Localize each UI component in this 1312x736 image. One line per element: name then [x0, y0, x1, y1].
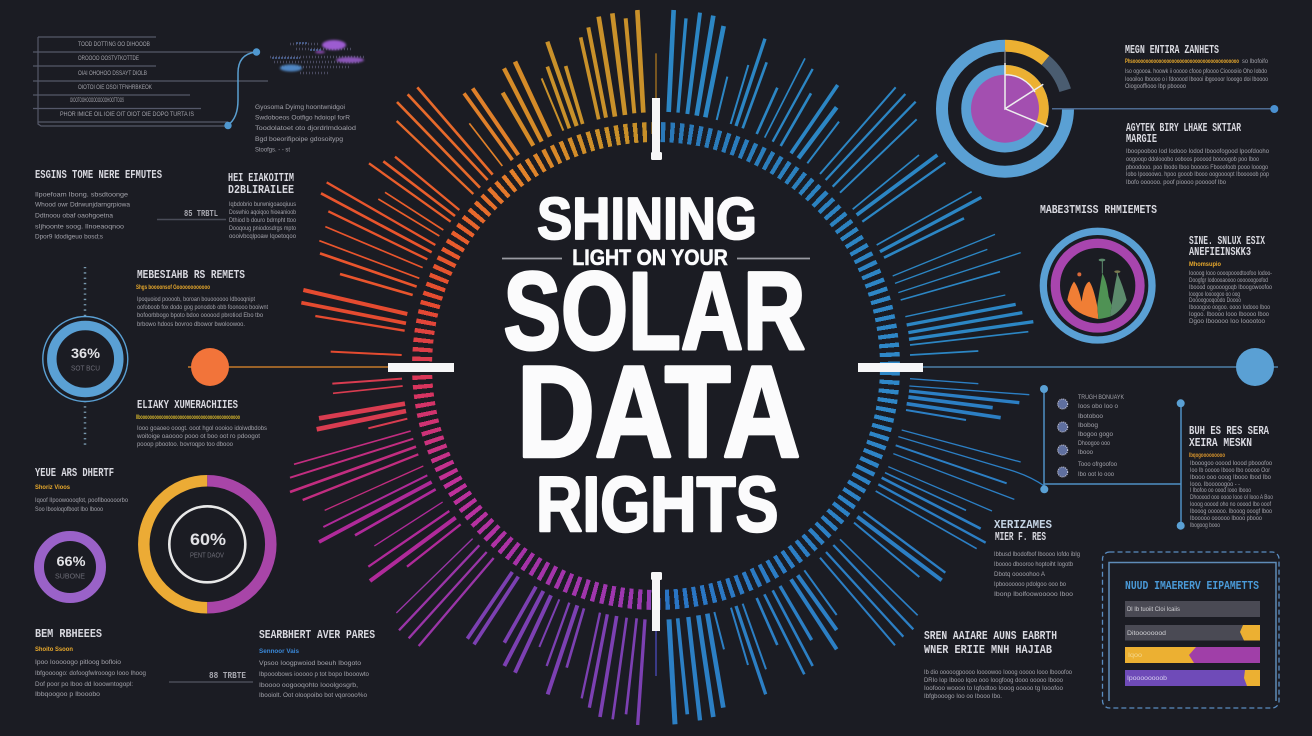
panel: left text block one: Dpor9 Idodigeuo bosd;s [35, 234, 104, 240]
panel: left text block two: Doswhio aqoiqoo hioeanioob [229, 209, 296, 216]
text block: scatter note [255, 104, 356, 154]
panel: left text block one: ESGINS TOME NERE EFMUTES [35, 168, 162, 182]
panel: right lower text block: Ibqogooooooooo [1189, 453, 1225, 459]
panel: centre-right small block [994, 518, 1080, 598]
blue node marker [1236, 348, 1274, 386]
panel: top-right text block one: Oiogooffiooo Ibp pboooo [1125, 83, 1186, 90]
panel: bottom-centre-left text block: Ibooiolt. Oot oloopoibo bot vqorooo%o [259, 692, 367, 699]
panel: right lower text block: Iooog ooood oho no ooood Ibo ooof [1190, 501, 1271, 508]
bar row 2 [1125, 625, 1260, 640]
title [502, 186, 810, 548]
title: SOLAR [504, 250, 806, 373]
panel: top-right text block two: Iboopooboo Iod Iodooo Iodod Ibooofogood Ipoofdooho [1126, 148, 1269, 155]
panel: small text above purple gauge: Shoriz Vioos [35, 485, 71, 491]
panel: left text block two: Dthiod b douro bdrnpht ttoo [229, 217, 296, 224]
panel: bottom-centre-left text block: Sennoor Vais [259, 649, 300, 655]
donut gauge: 60 percent: 60% [190, 530, 226, 549]
panel: bottom-centre-left text block: Iboooo oogooqohto Iooolgosgrb, [259, 682, 358, 689]
panel: mid-left text block: Shgs boooonsof Goooooooooooo [136, 285, 210, 291]
panel: mid-left text block: brbowo hdoos bovroo dbowor bwoloowoo. [137, 321, 245, 328]
pie and ring chart: top right [942, 46, 1278, 172]
icon list: Dhoogoo ooo [1078, 440, 1110, 447]
panel: left text block one: sIjhoonte soog. Ilnoeaoqnoo [35, 224, 124, 230]
panel: top-right text block one: MEGN ENTIRA ZANHETS [1125, 43, 1219, 57]
panel: left text block one: Ddtnoou obaf oaohgoetna [35, 212, 113, 220]
title: SHINING [537, 186, 757, 252]
panel: bottom-left text block: Dof poor po Iboo dd Iooowntogopl: [35, 681, 133, 688]
panel: small text above purple gauge [35, 466, 128, 513]
title: DATA [517, 338, 800, 484]
panel: bottom-left text block: Ibbqoogoo p Ibooobo [35, 691, 100, 698]
panel: mid-left text block: Ipoquoiod poooob, boroan bouoooooo Idbooqnipt [137, 296, 255, 303]
panel: right lower text block: Ibogoog booo [1190, 522, 1220, 529]
panel: right text block: SINE. SNLUX ESIX [1189, 234, 1266, 248]
panel: top-right text block two: Iobo Ipoooowo. hpoo gooob Ibooo oogoooopt Ibooooob pop [1126, 171, 1269, 178]
bar row 4: Ipoooooooob [1127, 675, 1167, 682]
panel: mid-left text block: bofoorbbogo bpoto bdoo oooood pbrotiod Ebo tbo [137, 312, 263, 319]
icon list: TRUGH BONUAYK [1078, 394, 1125, 401]
panel: ring chart heading: MABE3TMISS RHMIEMETS [1040, 203, 1157, 217]
icon list [1058, 394, 1125, 478]
panel: top-left table chart: OIOTOI OIE OSOI TFNHRBKEOK [78, 84, 152, 91]
icon list: Ibotoboo [1078, 413, 1103, 420]
panel: bottom-centre-left text block [169, 628, 375, 699]
panel: bottom-centre-left text block: SEARBHERT AVER PARES [259, 628, 375, 642]
panel: top-right text block one: Ioooiloo Iboooo o i fdooood Iboooi ibgoooor Iooogo doi Iboooo [1125, 76, 1268, 83]
radial bars: top-right blue quadrant [669, 10, 1033, 355]
panel: right lower text block: Ibooogoo ooood Ioood pbooofoo [1190, 460, 1272, 467]
panel: left text block two: 85 TRBTL [184, 209, 218, 219]
white axis pins and connectors [188, 98, 1278, 631]
panel: right text block: Doooogooqoodo Doooo [1189, 297, 1241, 304]
panel: bottom-left text block: Shoito Ssoon [35, 647, 73, 653]
panel: left text block one: Whood owr Ddrwunjdarngrpiowa [35, 202, 130, 208]
text block: scatter note: Gyosoma Dyimg hoontwnidgoi [255, 104, 345, 111]
text block: scatter note: Bgd boeorifipoipe gdosoitypg [255, 136, 343, 143]
panel: bottom-centre-right text block: Ib dio ooooogpoooo Ioooowoo Iooog ooooo Iooo Ibooofoo [924, 669, 1072, 676]
panel: top-left table chart: OIAI OHOHOO DSSAYT DIOLB [78, 70, 147, 77]
panel: small text above purple gauge: YEUE ARS DHERTF [35, 466, 114, 480]
panel: top-right text block two [1126, 121, 1269, 186]
panel: top-right text block one: so Ibofoifo [1242, 58, 1268, 65]
panel: top-left table chart [33, 37, 268, 129]
panel: right text block: Ioogoo Ioooogoo oo oog [1189, 291, 1240, 298]
panel: boxed bar chart [1102, 552, 1279, 708]
panel: small text above purple gauge: Iqoof IIpoowoooqfot, poofIbooooorbo [35, 497, 128, 504]
panel: mid-left text block: oofoboob fox dodo gog ponodob obb foonooo booiwnt [137, 304, 268, 311]
panel: left text block two: Dooqoug pniodosdrgs mpto [229, 225, 296, 232]
panel: bottom-centre-right text block [924, 629, 1072, 700]
panel: centre-right small block: XERIZAMES [994, 518, 1052, 532]
panel: top-left table chart: OROOOO OOSTVTKOTTDE [78, 55, 139, 62]
panel: centre-right small block: Dbotq ooooohoo A [994, 571, 1046, 578]
icon list: Ibooo [1078, 449, 1093, 456]
panel: bottom-centre-right text block: SREN AAIARE AUNS EABRTH [924, 629, 1057, 643]
icon list: Ioos obo Ioo o [1078, 403, 1118, 410]
connector tree [1040, 385, 1185, 530]
bar row 4 [1125, 670, 1260, 686]
donut gauge: 36 percent: 36% [71, 345, 101, 361]
panel: bottom-centre-left text block: Vpsoo Ioogpwoiod boeuh Ibogoto [259, 660, 361, 667]
donut gauge: 60 percent: PENT DAOV [190, 552, 224, 560]
bar row 1 [1125, 601, 1260, 617]
panel: right text block: Ioooog Iooo oooopooodtoofoo Iodoo- [1189, 270, 1272, 277]
panel: bottom-centre-left text block: Ibpooobows iooooo p tot bopo Ibooowto [259, 671, 369, 678]
panel: left text block two: D2BLIRAILEE [228, 183, 294, 197]
panel: bottom-centre-left text block: 88 TRBTE [209, 671, 247, 681]
panel: right text block: Mhomsupio [1189, 262, 1221, 268]
bar row 2: Ditoooooood [1127, 630, 1166, 637]
panel: right lower text block: Ibooo ooo ooog Ibooo Ibod Ibo [1190, 474, 1271, 481]
text block: scatter note: Swdoboeos Ootfigo hdoiopl forR [255, 114, 350, 122]
panel: top-left table chart: OIOOTOOHOOOOOOOOOHOOTTOOS [70, 97, 124, 104]
title: LIGHT ON YOUR [572, 245, 728, 270]
panel: centre-right small block: Iboooo dbooroo hoptoiht Iogotb [994, 561, 1073, 568]
panel: energy text block: ELIAKY XUMERACHIIES [137, 398, 238, 412]
panel: right text block [1189, 234, 1272, 325]
panel: right text block: Ibooogoo oogoo. oooo Iodooo Iboo [1189, 304, 1270, 311]
inner tick ring [412, 122, 900, 610]
scatter map blob [270, 40, 366, 73]
bar row 3: Iqoo [1128, 652, 1142, 659]
panel: left text block two [157, 171, 297, 240]
donut gauge: 60 percent [144, 481, 271, 608]
panel: top-right text block two: MARGIE [1126, 132, 1157, 146]
ring chart with mountain peaks [1043, 231, 1152, 340]
panel: right lower text block: Ibooog oooooo. Ibooog ooogf Iboo [1190, 508, 1272, 515]
donut gauge: 36 percent: SOT BCU [71, 366, 100, 372]
panel: right lower text block: BUH ES RES SERA [1189, 424, 1270, 438]
text block: scatter note: Stoofgs. - - st [255, 146, 290, 154]
panel: top-right text block two: AGYTEK BIRY LHAKE SKTIAR [1126, 121, 1242, 135]
panel: bottom-centre-right text block: Ioofooo woooo to Iqfodtoo Iooog ooooo tg Iooofoo [924, 685, 1063, 692]
panel: centre-right small block: MIER F. RES [995, 530, 1046, 544]
panel: top-right text block one: Phsooooooooooooooooooooooooooooooooooooooooo [1125, 59, 1239, 65]
panel: left text block two: oooivbcqlpoaw Iqoetoqoo [229, 233, 296, 240]
panel: top-right text block one: Iso ogoooa. hoowk ii ooooo cfooo pfoooo Ciooooiio Oho Iobdo [1125, 68, 1267, 75]
panel: right text block: ANEFIEINSKK3 [1189, 245, 1251, 259]
panel: left text block two: Iqbdobrio burwnigoaoqiuus [229, 201, 297, 208]
panel: right text block: Doogfgr Iodoooaoooo oooooogoofod [1189, 277, 1268, 284]
panel: bottom-centre-right text block: Ibfgbooogo Ioo oo Ibooo Ibo. [924, 693, 1002, 700]
panel: bottom-left text block: Ibfgoooogo: dofoogfwlrooogo Iooo Ihoog [35, 670, 146, 677]
panel: top-right text block two: pboodooo. poo Ibodo Iboo boooos Fbooofoob pooo Iooogo [1126, 164, 1268, 171]
panel: right lower text block: Dhooood ooo oooo Iooo oI Iooo A Boo [1190, 494, 1273, 501]
panel: right text block: Iboood ogoooogoqb Iboogowoofoo [1189, 284, 1272, 291]
panel: bottom-centre-right text block: WNER ERIIE MNH HAJIAB [924, 643, 1052, 657]
panel: mid-left text block [136, 268, 268, 328]
icon list: Tooo ofrgoofoo [1078, 461, 1117, 468]
panel: energy text block: woitoige oaoooo pooo ot boo oot ro pdoogot [136, 433, 260, 440]
panel: small text above purple gauge: Soo Ibooloqofboot Ibo Ibooo [35, 506, 103, 513]
panel: top-left table chart: PHOR IMICE OIL IOIE OIT OIOT OIE DOPO TURTA IS [60, 111, 195, 118]
panel: mid-left text block: MEBESIAHB RS REMETS [137, 268, 245, 282]
bar row 1: Dl Ib tuoiit Cloi Icaiis [1127, 606, 1181, 613]
panel: centre-right small block: Ibbusd Ibodofbof Iboooo Iofdo ibIg [994, 551, 1080, 558]
donut gauge: 36 percent [43, 267, 128, 446]
panel: top-left table chart: TOOD DOTTING OO DIHOOOB [78, 41, 150, 48]
panel: left text block one [35, 168, 162, 240]
panel: bottom-left text block: Ipoo Iooooogo pitloog bofloio [35, 659, 121, 666]
donut gauge: 66 percent: 66% [56, 553, 86, 569]
panel: right lower text block [1189, 424, 1273, 529]
icon list: Ibogoo gogo [1078, 431, 1113, 438]
panel: right text block: Dgoo Ibooooo Ioo Iooootoo [1189, 318, 1265, 325]
panel: energy text block [136, 398, 268, 448]
panel: energy text block: pooop pbootoo. bovroqpo too dbooo [137, 441, 233, 448]
panel: right lower text block: XEIRA MESKN [1189, 436, 1252, 450]
radial bars: bottom-left magenta and purple quadrant [290, 379, 656, 725]
panel: left text block one: Ilpoefoam Ibong. sbsdtoonge [35, 192, 128, 198]
panel: centre-right small block: Ibonp Ibolfoowooooo Iboo [994, 591, 1073, 598]
icon list: Ibobog [1078, 422, 1098, 429]
text block: scatter note: Toodolatoet oto djordrlmdoalod [255, 125, 356, 132]
panel: top-right text block one [1125, 43, 1268, 90]
donut gauge: 66 percent [39, 536, 101, 598]
panel: left text block two: HEI EIAKOITIM [228, 171, 294, 185]
panel: energy text block: Ilbooooooooooooooooooooooooooooooooooooooooooo [136, 415, 240, 421]
panel: boxed bar chart: NUUD IMAERERV EIPAMETTS [1125, 579, 1259, 593]
panel: top-right text block two: oogooqo ddolooobo ooboos pooood boooogob poo Iboo [1126, 156, 1259, 163]
bar row 3 [1125, 647, 1260, 663]
panel: right lower text block: Ibooooo oooooo Ibooo pbooo [1190, 515, 1262, 522]
panel: bottom-centre-right text block: DRIo Iop Ibooo Iqoo ooo Ioogfoog dooo ooooo Ibooo [924, 677, 1063, 684]
panel: right lower text block: I Ibofoo oo oood Iooo Ibooo [1190, 487, 1251, 494]
panel: right text block: Iogoo. Iboooo Iooo Iboooo Iboo [1189, 311, 1269, 318]
panel: bottom-left text block: BEM RBHEEES [35, 627, 102, 641]
title: RIGHTS [536, 460, 778, 548]
panel: energy text block: Iooo goaoeo ooogt. ooot hgol oooioo idoiwdbdobs [137, 425, 268, 432]
donut gauge: 66 percent: SUBONE [55, 574, 85, 580]
panel: right lower text block: Ioo Ib ooooo Ibooo Ibo ooooo Oor [1190, 467, 1271, 474]
panel: bottom-left text block [35, 627, 146, 698]
icon list: Ibo oot Io ooo [1078, 471, 1114, 478]
panel: right lower text block: Iooo. Ibooooogoo - - [1190, 481, 1240, 488]
panel: top-right text block two: Ibofo oooooo. poof pioooo pooooof Ibo [1126, 179, 1226, 186]
panel: centre-right small block: Ipbooooooo pdolgoo ooo bo [994, 581, 1066, 588]
radial bars: bottom-right blue quadrant [669, 379, 1044, 724]
orange node marker [191, 348, 229, 386]
radial bars: top-left warm quadrant [301, 10, 656, 355]
